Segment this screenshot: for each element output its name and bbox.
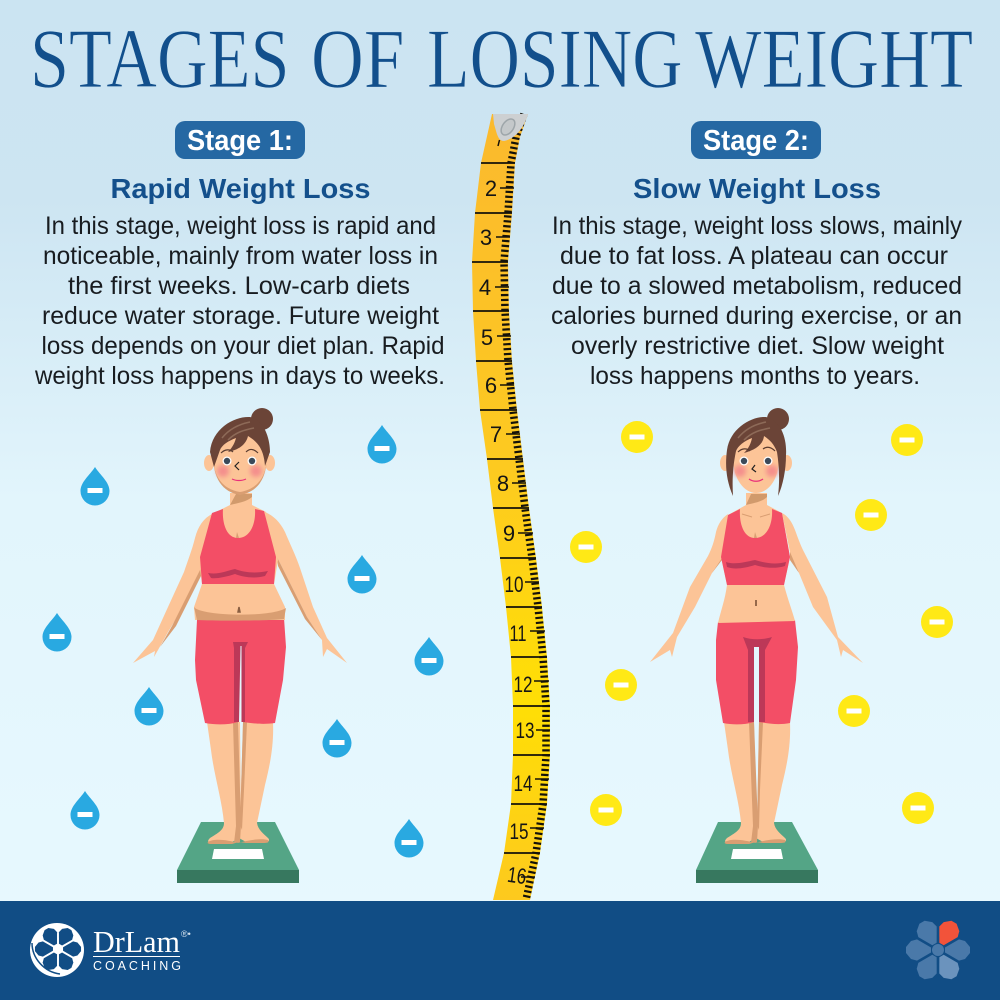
text block: stage 2 description: In this stage, weight loss slows, mainly <box>552 212 962 240</box>
tape numbers: 4 <box>479 275 491 300</box>
tape numbers: 15 <box>510 819 528 844</box>
text block: stage 2 description: loss happens months to years. <box>590 362 920 390</box>
text block: stage 2 description <box>551 212 962 390</box>
heading: rapid weight loss: Rapid Weight Loss <box>110 173 370 204</box>
shorts <box>195 618 286 724</box>
text block: stage 1 description: reduce water storage. Future weight <box>42 302 439 330</box>
tape numbers: 2 <box>485 176 497 201</box>
text block: stage 2 description: calories burned during exercise, or an <box>551 302 962 330</box>
tape numbers: 10 <box>504 572 524 597</box>
footer bar <box>0 901 1000 1000</box>
tape numbers: 16 <box>506 862 528 889</box>
torso <box>194 493 286 621</box>
text block: stage 1 description: loss depends on your diet plan. Rapid <box>42 332 444 360</box>
head <box>204 408 275 495</box>
figure: woman before, on scale <box>133 408 347 883</box>
heading: slow weight loss: Slow Weight Loss <box>633 173 881 204</box>
badge: stage 1: Stage 1: <box>187 125 293 157</box>
icon: flower emblem <box>906 917 970 983</box>
text block: stage 1 description: the first weeks. Low-carb diets <box>68 272 410 300</box>
tape numbers: 13 <box>516 718 534 743</box>
tape numbers: 7 <box>490 422 502 447</box>
shorts <box>716 620 798 724</box>
text block: stage 1 description: In this stage, weight loss is rapid and <box>45 212 436 240</box>
text block: stage 1 description <box>34 212 445 390</box>
legs <box>724 722 790 844</box>
title: OF <box>311 12 404 106</box>
badge: stage 2: Stage 2: <box>703 125 809 157</box>
panel: stage 2 text <box>551 121 962 390</box>
tape end cap <box>493 114 528 141</box>
figure: woman after, on scale <box>650 408 863 883</box>
logo: DrLam Coaching: ®• <box>181 929 191 939</box>
measuring tape <box>472 114 550 900</box>
scale <box>177 822 299 883</box>
text block: stage 1 description: weight loss happens in days to weeks. <box>34 362 445 390</box>
icons: water drops <box>42 425 444 858</box>
arms <box>650 513 863 663</box>
text block: stage 2 description: due to fat loss. A plateau can occur <box>560 242 948 270</box>
sports bra <box>721 509 790 585</box>
torso <box>718 493 795 623</box>
head <box>720 408 792 496</box>
tape numbers: 5 <box>481 325 493 350</box>
scale <box>696 822 818 883</box>
tape numbers: 8 <box>497 471 509 496</box>
title: STAGES <box>30 12 290 106</box>
title <box>30 11 973 106</box>
sports bra <box>200 509 276 584</box>
text block: stage 2 description: due to a slowed metabolism, reduced <box>552 272 962 300</box>
tape numbers: 14 <box>514 771 532 796</box>
tape numbers: 3 <box>480 225 492 250</box>
logo wordmark: DrLam <box>93 924 180 959</box>
tape numbers <box>479 176 534 889</box>
tape numbers: 9 <box>503 521 515 546</box>
icons: fat coins <box>570 421 953 826</box>
text block: stage 2 description: overly restrictive diet. Slow weight <box>571 332 944 360</box>
arms <box>133 512 347 663</box>
title: LOSING <box>427 12 683 106</box>
title: WEIGHT <box>695 11 973 105</box>
panel: stage 1 text <box>34 121 445 390</box>
legs <box>207 722 273 844</box>
logo emblem <box>30 923 84 977</box>
tape numbers: 6 <box>485 373 497 398</box>
text block: stage 1 description: noticeable, mainly from water loss in <box>43 242 438 270</box>
tape numbers: 12 <box>514 672 532 697</box>
tape numbers: 11 <box>510 621 526 646</box>
logo: DrLam Coaching <box>30 923 191 977</box>
logo tagline: COACHING <box>93 959 181 973</box>
